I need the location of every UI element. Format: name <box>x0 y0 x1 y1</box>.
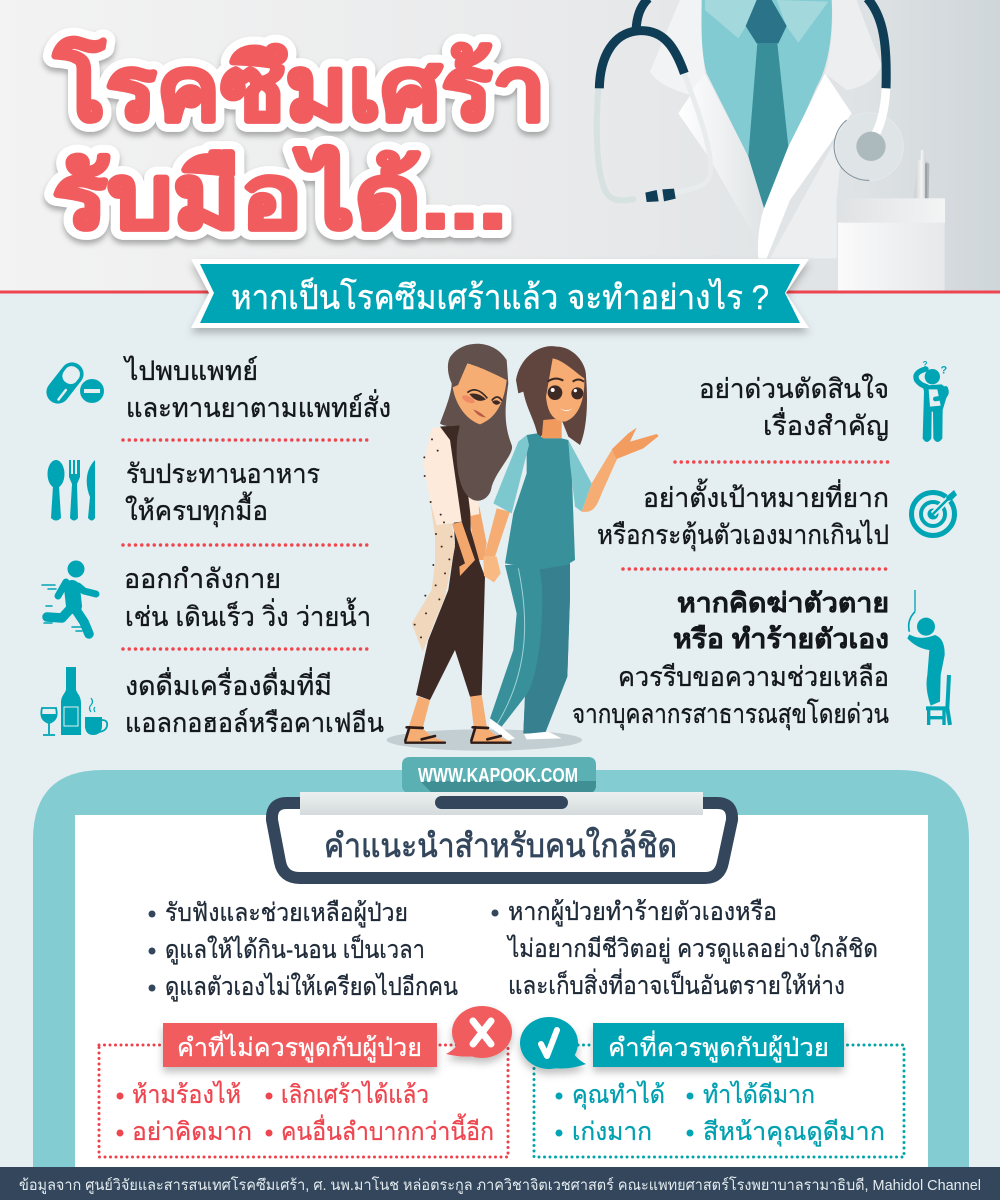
clip handle <box>435 796 568 809</box>
text: walk run swim: เช่น เดินเร็ว วิ่ง ว่ายน้ำ <box>125 597 371 632</box>
coat shoulder left <box>650 0 705 95</box>
text: exercise: ออกกำลังกาย <box>124 564 281 594</box>
red divider line right <box>785 290 1000 294</box>
right list: do not <box>572 360 957 731</box>
pen <box>914 150 929 198</box>
sad woman: coat <box>412 500 455 652</box>
happy woman: eyes and mouth <box>548 385 562 400</box>
icon: person on chair with noose <box>907 590 950 725</box>
stethoscope earpieces <box>645 189 676 202</box>
sad woman: coat dots <box>414 438 452 638</box>
illustration: two women walking <box>387 344 659 751</box>
happy woman: face <box>546 358 584 422</box>
say phrase 4: สีหน้าคุณดูดีมาก <box>703 1118 885 1147</box>
avoid phrase 1: ห้ามร้องไห้ <box>132 1080 241 1109</box>
bullet 3: ดูแลตัวเองไม่ให้เครียดไปอีกคน <box>165 972 458 1002</box>
icon: target with arrow <box>912 490 957 536</box>
say label <box>593 1023 844 1067</box>
icon: runner <box>42 560 96 634</box>
background: upper panel <box>0 0 1000 292</box>
watermark tab <box>402 757 596 793</box>
left list: do <box>41 355 391 738</box>
banner text: หากเป็นโรคซึมเศร้าแล้ว จะทำอย่างไร ? <box>231 277 769 317</box>
sad woman: hair <box>440 344 512 501</box>
icon: confused person: ? <box>923 360 928 369</box>
text: alcohol caffeine: แอลกอฮอล์หรือคาเฟอีน <box>125 707 384 738</box>
coat shoulder right <box>825 0 882 90</box>
text: seek help: ควรรีบขอความช่วยเหลือ <box>618 662 889 692</box>
banner ribbon <box>191 259 809 328</box>
illustration: doctor with stethoscope <box>597 0 945 292</box>
background: lower panel <box>0 292 1000 1200</box>
icon: check bubble <box>520 1017 586 1069</box>
say phrase 2: ทำได้ดีมาก <box>703 1080 815 1109</box>
lapel right <box>758 73 852 258</box>
icon: confused person <box>916 360 947 442</box>
avoid phrase 4: คนอื่นลำบากกว่านี้อีก <box>281 1113 494 1146</box>
watermark text: WWW.KAPOOK.COM <box>418 765 578 787</box>
text: every meal: ให้ครบทุกมื้อ <box>125 491 268 528</box>
heading frame <box>272 792 732 878</box>
sandals <box>405 727 511 743</box>
sad woman: sleeve <box>423 427 462 525</box>
tie <box>748 43 788 208</box>
right line 2: ไม่อยากมีชีวิตอยู่ ควรดูแลอย่างใกล้ชิด <box>506 934 878 964</box>
text: avoid drinks: งดดื่มเครื่องดื่มที่มี <box>125 667 332 701</box>
title line 1: โรคซึมเศร้า <box>53 37 546 140</box>
stethoscope light tube right <box>672 74 711 193</box>
say label text: คำที่ควรพูดกับผู้ป่วย <box>608 1030 829 1063</box>
sad woman: features <box>467 390 502 401</box>
text: or self harm: หรือ ทำร้ายตัวเอง <box>673 624 889 654</box>
heading text: คำแนะนำสำหรับคนใกล้ชิด <box>324 827 677 864</box>
title line 2: รับมือได้... <box>52 146 507 248</box>
collar left <box>705 0 757 38</box>
bullet 2: ดูแลให้ได้กิน-นอน เป็นเวลา <box>165 934 425 965</box>
footer source bar <box>0 1167 1000 1200</box>
stethoscope light tube left <box>597 88 633 200</box>
pen holder <box>838 222 945 292</box>
happy woman: torso <box>505 433 575 569</box>
say phrase 1: คุณทำได้ <box>572 1080 665 1110</box>
text: eat: รับประทานอาหาร <box>126 459 320 489</box>
happy woman: trousers <box>490 563 570 733</box>
text: from health staff: จากบุคลากรสาธารณสุขโดยด่วน <box>572 699 889 731</box>
happy woman: neck <box>542 418 562 438</box>
coat body right <box>770 120 847 258</box>
collar right <box>777 0 828 43</box>
ground shadow <box>387 729 582 751</box>
icon: cross bubble <box>446 1006 512 1058</box>
happy woman: sleeves <box>493 435 592 513</box>
title line 2: รับมือได้... <box>52 146 507 248</box>
say phrase 3: เก่งมาก <box>572 1118 652 1146</box>
text: do not rush decisions: อย่าด่วนตัดสินใจ <box>699 373 889 404</box>
text: suicidal thoughts: หากคิดฆ่าตัวตาย <box>677 588 889 618</box>
icon: bottle glass coffee <box>41 667 107 735</box>
text: do not set hard goals: อย่าตั้งเป้าหมายที่ยาก <box>643 478 889 513</box>
stethoscope dark tube <box>599 0 886 88</box>
avoid label <box>163 1023 437 1067</box>
clipboard paper <box>75 815 928 1168</box>
lapel left <box>678 73 764 243</box>
bullet 1: รับฟังและช่วยเหลือผู้ป่วย <box>165 899 408 928</box>
text: take medicine: และทานยาตามแพทย์สั่ง <box>126 389 391 423</box>
stethoscope white tube right <box>875 88 886 135</box>
avoid label text: คำที่ไม่ควรพูดกับผู้ป่วย <box>177 1030 422 1063</box>
sad woman: dark dress and trousers <box>416 425 485 700</box>
text: or push yourself: หรือกระตุ้นตัวเองมากเกินไป <box>597 520 889 552</box>
right line 1: หากผู้ป่วยทำร้ายตัวเองหรือ <box>508 898 777 927</box>
icon: spoon fork knife <box>48 460 95 520</box>
sad woman: far arm <box>468 507 487 560</box>
happy woman: near arm and hand <box>582 450 617 512</box>
title line 1: โรคซึมเศร้า <box>53 37 546 140</box>
happy woman: hair back <box>516 346 587 445</box>
stethoscope chest piece <box>835 113 903 181</box>
happy woman: shoes <box>489 718 562 741</box>
right line 3: และเก็บสิ่งที่อาจเป็นอันตรายให้ห่าง <box>508 968 845 1000</box>
text: important matters: เรื่องสำคัญ <box>763 407 889 441</box>
avoid phrase 3: อย่าคิดมาก <box>132 1118 252 1146</box>
advice bullets right <box>492 898 878 1000</box>
sad woman: near arm <box>452 522 475 576</box>
sad woman: legs <box>408 694 487 730</box>
shirt <box>701 0 832 208</box>
clipboard board <box>33 770 969 1170</box>
sad woman: face <box>453 363 507 424</box>
advice bullets left <box>148 899 458 1002</box>
footer text: ข้อมูลจาก ศูนย์วิจัยและสารสนเทศโรคซึมเศร้า, ศ. นพ.มาโนช หล่อตระกูล ภาควิชาจิตเวชศาสตร์ คณะแพทยศาสตร์โรงพยาบาลรามาธิบดี, Mahidol Channel <box>19 1176 981 1194</box>
panel: words to say <box>520 1017 904 1157</box>
panel: words to avoid <box>99 1006 512 1157</box>
red divider line left <box>0 290 215 294</box>
icon: confused person: ? <box>941 364 947 376</box>
icon: pills <box>42 358 104 408</box>
clip bar <box>300 792 703 815</box>
happy woman: far arm and hand <box>484 508 510 557</box>
tie knot <box>746 0 787 43</box>
text: see a doctor: ไปพบแพทย์ <box>123 355 258 386</box>
avoid phrase 2: เลิกเศร้าได้แล้ว <box>281 1080 429 1109</box>
